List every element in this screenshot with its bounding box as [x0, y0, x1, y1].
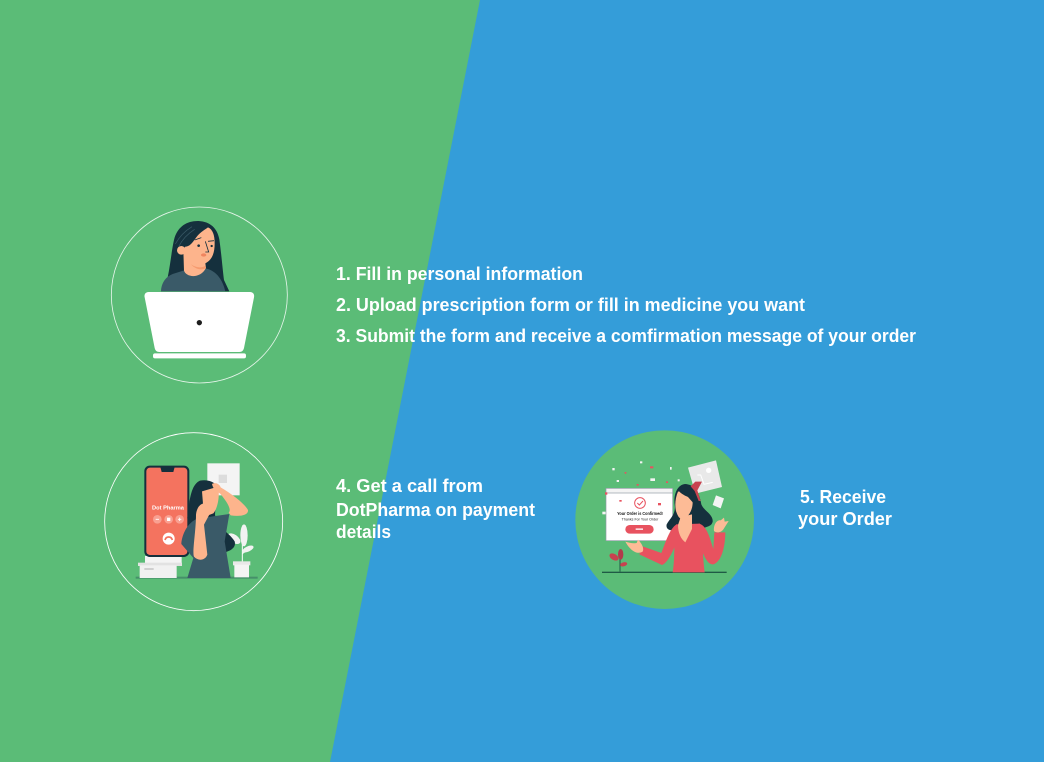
step 4 text — [336, 475, 535, 542]
step 3: 3. Submit the form and receive a comfirmation message of your order — [336, 325, 916, 346]
step 5 text: your Order — [798, 508, 892, 529]
step 1: 1. Fill in personal information — [336, 263, 583, 284]
icon: woman receiving a phone call in outlined circle — [105, 433, 283, 611]
background: green diagonal panel — [0, 0, 480, 762]
step 4 text: 4. Get a call from — [336, 475, 483, 496]
step 5 text: 5. Receive — [800, 486, 886, 507]
woman: neck and face — [678, 514, 692, 542]
woman: sweater — [673, 524, 705, 572]
icon: woman receiving a phone call in outlined circle: Dot Pharma — [152, 506, 185, 512]
pot plant — [226, 524, 255, 577]
step 5 text — [798, 486, 892, 529]
icon: woman presenting order confirmation in green circle: Thanks For Your Order — [622, 518, 659, 522]
step 4 text: details — [336, 521, 391, 542]
icon: woman presenting order confirmation in green circle: Your Order is Confirmed! — [617, 511, 663, 516]
icon: woman behind laptop in outlined circle — [111, 207, 287, 383]
steps 1 to 3 text — [336, 263, 916, 346]
step 4 text: DotPharma on payment — [336, 499, 535, 520]
step 2: 2. Upload prescription form or fill in medicine you want — [336, 294, 805, 315]
icon: woman presenting order confirmation in green circle — [575, 430, 754, 609]
woman: hair back — [666, 484, 713, 536]
